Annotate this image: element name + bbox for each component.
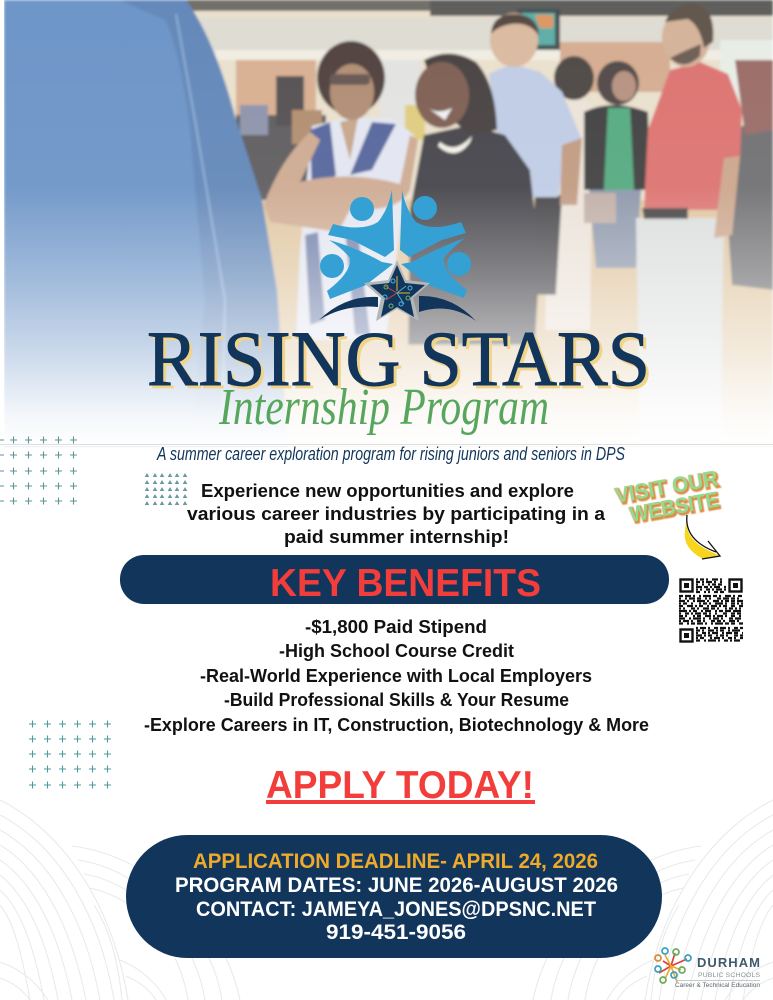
QR code — [679, 578, 743, 643]
bottom wave background — [0, 800, 773, 1000]
tv — [517, 9, 560, 50]
woman black jacket — [408, 125, 540, 345]
callout: visit our website: VISIT OUR — [614, 467, 721, 510]
contact email: CONTACT: JAMEYA_JONES@DPSNC.NET — [196, 897, 596, 921]
photo: interns and staff networking at event — [0, 0, 773, 446]
woman striped dress — [296, 118, 414, 340]
arrow: yellow curved to QR — [685, 515, 720, 559]
benefits list — [144, 616, 649, 735]
benefits list: -Explore Careers in IT, Construction, Biotechnology & More — [144, 714, 649, 735]
man in blue suit — [4, 0, 288, 445]
call to action: apply today: APPLY TODAY! — [266, 764, 534, 807]
logo: Durham Public Schools CTE: Career & Technical Education — [675, 982, 760, 989]
logo: Durham Public Schools CTE: DURHAM — [697, 955, 760, 970]
man red polo — [636, 218, 724, 445]
program dates: PROGRAM DATES: JUNE 2026-AUGUST 2026 — [175, 873, 618, 897]
man blue polo — [530, 195, 562, 295]
title: Rising Stars: RISING STARS — [147, 315, 650, 402]
deadline: APPLICATION DEADLINE- APRIL 24, 2026 — [193, 849, 598, 873]
chairs — [722, 120, 773, 290]
benefits list: -Build Professional Skills & Your Resume — [224, 689, 569, 710]
decoration: plus grid top-left — [0, 436, 77, 504]
phone: 919-451-9056 — [326, 920, 466, 944]
intro text: various career industries by participating in a — [187, 503, 606, 524]
floral dress woman — [541, 95, 604, 330]
decoration: triangle grid — [145, 473, 187, 505]
title: Rising Stars: RISING STARS — [150, 318, 653, 405]
fade to white — [0, 0, 773, 446]
benefits list: -$1,800 Paid Stipend — [305, 616, 487, 637]
logo: Durham Public Schools CTE — [655, 948, 760, 989]
logo: Durham Public Schools CTE: PUBLIC SCHOOLS — [698, 972, 760, 979]
panel: application details — [126, 835, 662, 958]
benefits list: -High School Course Credit — [279, 640, 514, 661]
intro text — [187, 480, 606, 547]
heading: key benefits: KEY BENEFITS — [270, 562, 541, 605]
callout: visit our website: WEBSITE — [628, 486, 721, 527]
decoration: plus grid lower-left — [29, 720, 111, 788]
green top woman — [589, 190, 641, 268]
callout: visit our website — [613, 465, 725, 531]
intro text: paid summer internship! — [284, 526, 509, 547]
callout: visit our website: VISIT OUR — [613, 465, 720, 508]
tagline: A summer career exploration program for rising juniors and seniors in DPS — [156, 444, 625, 464]
callout: visit our website: WEBSITE — [629, 488, 722, 529]
intro text: Experience new opportunities and explore — [201, 480, 574, 501]
icon: circuit nodes — [655, 948, 691, 983]
benefits list: -Real-World Experience with Local Employers — [200, 665, 592, 686]
logo: rising stars people and star — [319, 190, 476, 321]
icon: navy star with circuit — [370, 265, 425, 317]
subtitle: Internship Program: Internship Program — [218, 379, 549, 436]
panel: key benefits banner — [120, 555, 669, 605]
